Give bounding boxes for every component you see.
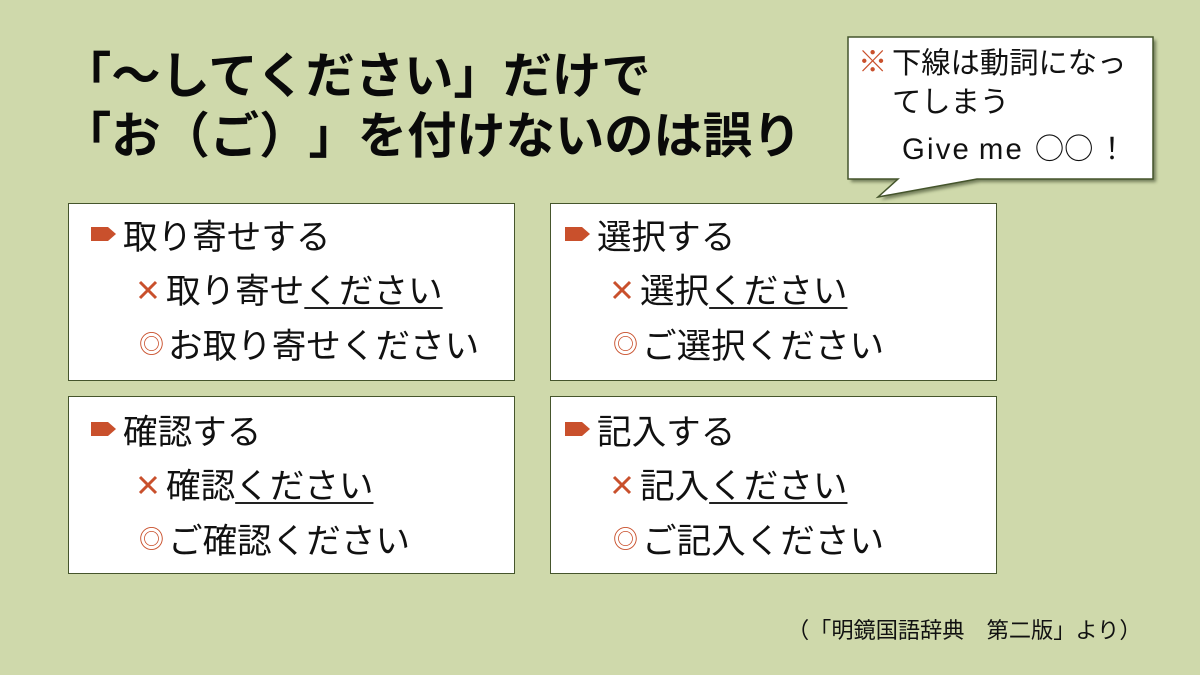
icon: arrow: [565, 227, 590, 241]
panel: 選択する: 選択する: [597, 219, 735, 257]
callout: speech bubble: てしまう: [892, 86, 1009, 119]
panel: 取り寄せする: 取り寄せください: [166, 273, 443, 311]
panel: 取り寄せする: [68, 203, 515, 381]
panel: 取り寄せする: 取り寄せする: [123, 219, 330, 257]
icon: arrow: [91, 227, 116, 241]
panel: 選択する: 選択ください: [640, 273, 847, 311]
panel: 確認する: 確認する: [123, 414, 261, 452]
icon: arrow: [91, 422, 116, 436]
icon: double circle: ◎: [139, 331, 164, 359]
panel: 記入する: [550, 396, 997, 574]
icon: double circle: ◎: [613, 331, 638, 359]
panel: 確認する: [68, 396, 515, 574]
panel: 取り寄せする: お取り寄せください: [168, 328, 479, 366]
panel: 選択する: ご選択ください: [642, 328, 884, 366]
panel: 記入する: 記入ください: [640, 468, 847, 506]
title: 「お（ご）」を付けないのは誤り: [62, 109, 801, 164]
callout: speech bubble: [847, 36, 1158, 202]
title: 「～してください」だけで: [62, 49, 651, 104]
icon: double circle: ◎: [139, 526, 164, 554]
panel: 記入する: ご記入ください: [642, 523, 884, 561]
title: [62, 49, 801, 164]
panel: 確認する: ご確認ください: [168, 523, 410, 561]
icon: cross: [613, 281, 631, 299]
panel: 選択する: [550, 203, 997, 381]
callout: speech bubble: ※: [858, 46, 887, 79]
icon: cross: [613, 476, 631, 494]
panel: 記入する: 記入する: [597, 414, 735, 452]
icon: cross: [139, 281, 157, 299]
icon: cross: [139, 476, 157, 494]
source note: （「明鏡国語辞典 第二版」より）: [787, 618, 1142, 643]
icon: double circle: ◎: [613, 526, 638, 554]
callout: speech bubble: Give me ○○！: [902, 126, 1129, 168]
panel: 確認する: 確認ください: [166, 468, 373, 506]
callout: speech bubble: 下線は動詞になっ: [892, 47, 1126, 80]
icon: arrow: [565, 422, 590, 436]
